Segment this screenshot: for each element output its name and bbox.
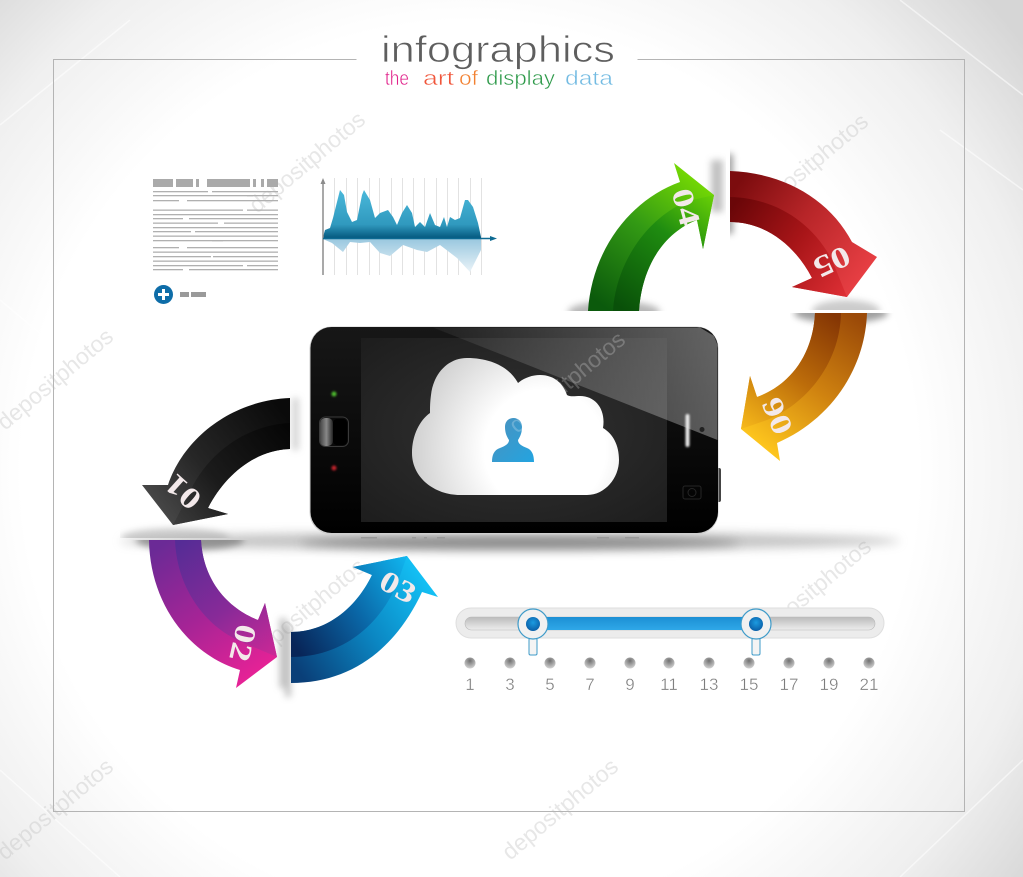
plus button with caption	[154, 285, 206, 304]
phone body	[310, 326, 718, 534]
speaker	[686, 414, 690, 447]
number: 06	[755, 392, 800, 439]
arrow inner band	[613, 195, 714, 311]
subtitle: data	[565, 68, 614, 90]
icon: cloud	[412, 358, 619, 495]
text block placeholder	[153, 179, 278, 270]
arrow body	[730, 171, 877, 297]
home button	[320, 417, 348, 446]
slider right handle	[741, 609, 771, 655]
arrow shadows	[120, 525, 228, 538]
chart axes	[320, 178, 497, 275]
arrow body	[291, 556, 438, 683]
slider outer track	[456, 608, 884, 638]
smartphone	[310, 326, 721, 538]
slider inner track	[465, 617, 875, 630]
screen	[361, 338, 667, 522]
chart grid lines	[334, 178, 482, 275]
slider tick labels	[465, 675, 878, 694]
arrow body	[142, 398, 290, 525]
area chart	[320, 178, 497, 275]
slider selected range	[533, 617, 756, 630]
indicator: red led	[332, 466, 336, 470]
number: 01	[159, 467, 208, 516]
arrow 06 orange	[741, 303, 888, 461]
subtitle: the	[385, 68, 409, 90]
slider tick labels: 13	[700, 675, 718, 694]
indicator: green led	[332, 392, 336, 396]
chart reflection	[323, 239, 481, 272]
slider tick labels: 7	[585, 675, 595, 694]
number: 03	[374, 564, 422, 611]
watermark lines and text: depositphotos	[747, 108, 873, 220]
slider tick labels: 17	[780, 675, 798, 694]
slider tick labels: 11	[660, 675, 678, 694]
arrow 02 purple	[136, 530, 287, 688]
floor shadow of phone	[120, 532, 900, 550]
arrow inner band	[291, 556, 407, 657]
slider tick labels: 5	[545, 675, 555, 694]
arrow 05 red	[724, 154, 880, 322]
caption placeholder	[180, 292, 206, 297]
slider tick labels: 1	[465, 675, 475, 694]
title: infographics	[381, 29, 615, 70]
slider tick labels: 21	[860, 675, 878, 694]
subtitle: display	[486, 68, 555, 90]
subtitle	[385, 68, 614, 90]
arrow inner band	[173, 423, 290, 525]
watermark lines and text: depositphotos	[244, 553, 370, 665]
arrow shadow	[791, 313, 891, 326]
watermark lines and text: depositphotos	[750, 533, 876, 645]
camera dot	[700, 427, 704, 432]
slider tick labels: 9	[625, 675, 635, 694]
arrow inner band	[741, 313, 841, 429]
arrow shadow	[285, 625, 291, 697]
slider tick labels: 15	[740, 675, 758, 694]
arrow shadows	[133, 540, 246, 554]
arrow body	[741, 313, 867, 461]
arrow body	[588, 163, 714, 311]
watermark lines and text: depositphotos	[497, 753, 623, 865]
arrow 03 blue	[285, 556, 438, 697]
chart area	[323, 190, 481, 238]
arrow 01 black	[121, 398, 299, 548]
icon: plus	[154, 285, 173, 304]
range slider	[456, 608, 884, 694]
subtitle: of	[459, 68, 478, 90]
arrow inner band	[730, 197, 847, 297]
icon: person	[492, 418, 534, 462]
subtitle: art	[423, 68, 455, 90]
glass reflection	[433, 328, 718, 440]
number: 02	[222, 621, 263, 665]
slider tick labels: 19	[820, 675, 838, 694]
slider left handle	[518, 609, 548, 655]
arrow shadows	[724, 154, 733, 234]
number: 05	[808, 239, 856, 284]
side buttons	[716, 468, 721, 502]
port marks	[361, 537, 639, 538]
slider tick marks	[464, 658, 874, 668]
arrow 04 green	[568, 160, 723, 323]
slider tick labels: 3	[505, 675, 515, 694]
icon: camera	[683, 486, 701, 499]
watermark on screen: depositphotos	[504, 326, 630, 438]
block lines	[153, 191, 278, 270]
block heading	[153, 179, 278, 187]
arrow inner band	[175, 540, 277, 657]
watermark lines and text: depositphotos	[244, 106, 370, 218]
arrow shadows	[566, 299, 662, 311]
page frame	[54, 60, 964, 812]
number: 04	[665, 185, 706, 229]
arrow body	[149, 540, 277, 688]
